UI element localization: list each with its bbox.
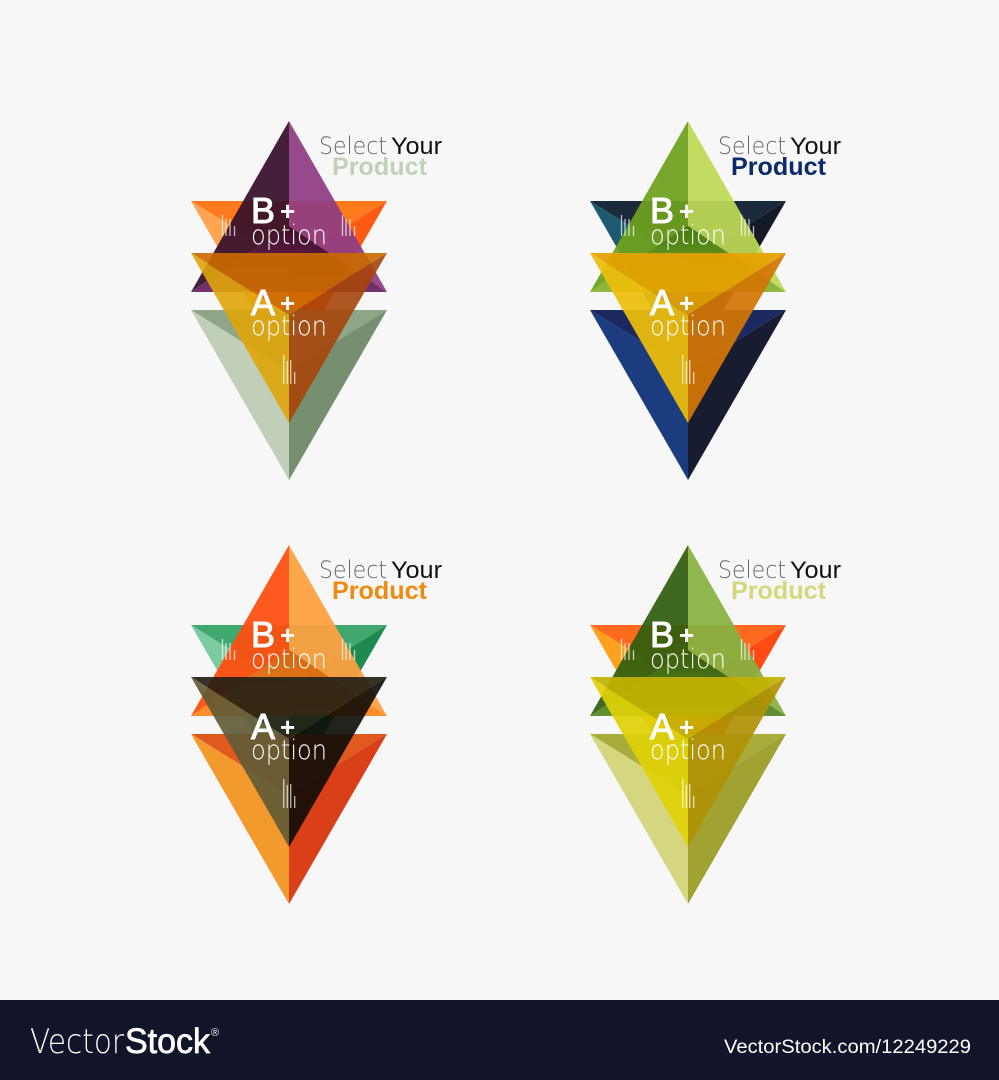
icon: bars right xyxy=(342,639,354,660)
footer logo: Vector xyxy=(30,1022,124,1062)
label: A+ option: A xyxy=(251,706,275,747)
label: A+ option: A xyxy=(650,706,674,747)
yellow downward triangle xyxy=(590,253,786,423)
label: B+ option: option xyxy=(650,644,726,675)
label: A+ option: + xyxy=(280,288,295,318)
label: B+ option xyxy=(650,190,726,251)
green upward triangle xyxy=(590,121,786,292)
icon: bars bottom xyxy=(284,779,295,808)
icon: bars left xyxy=(622,639,634,660)
heading: select your product: Your xyxy=(391,557,442,584)
green upward triangle xyxy=(590,545,786,716)
label: B+ option: B xyxy=(251,614,275,655)
label: B+ option: option xyxy=(251,644,327,675)
heading: select your product xyxy=(718,132,841,181)
heading: select your product: Select xyxy=(718,556,786,584)
label: A+ option: + xyxy=(679,712,694,742)
footer logo: ® xyxy=(211,1027,219,1039)
icon: bars right xyxy=(742,215,754,236)
heading: select your product: Select xyxy=(319,132,387,160)
dark downward triangle xyxy=(191,677,387,847)
orange and red downward triangle xyxy=(191,734,387,904)
label: A+ option: + xyxy=(280,712,295,742)
icon: bars bottom xyxy=(284,355,295,384)
heading: select your product: Select xyxy=(319,556,387,584)
amber downward triangle xyxy=(191,253,387,423)
heading: select your product: Product xyxy=(332,153,428,181)
footer image id: VectorStock.com/12249229 xyxy=(724,1037,971,1058)
heading: select your product: Your xyxy=(790,557,841,584)
label: B+ option: B xyxy=(251,190,275,231)
sage downward triangle xyxy=(191,310,387,480)
icon: bars right xyxy=(742,639,754,660)
heading: select your product: Product xyxy=(731,153,827,181)
back orange triangle xyxy=(590,625,786,795)
panel: option graphic green and navy xyxy=(590,121,841,480)
olive downward triangle xyxy=(590,734,786,904)
label: B+ option: option xyxy=(650,220,726,251)
heading: select your product xyxy=(319,132,442,181)
label: B+ option xyxy=(251,614,327,675)
label: A+ option: option xyxy=(251,735,327,766)
label: B+ option xyxy=(251,190,327,251)
heading: select your product xyxy=(319,556,442,605)
label: A+ option: A xyxy=(650,282,674,323)
orange upward triangle xyxy=(191,545,387,716)
label: B+ option xyxy=(650,614,726,675)
icon: bars right xyxy=(342,215,354,236)
back orange triangle xyxy=(191,201,387,371)
heading: select your product: Product xyxy=(332,577,428,605)
label: B+ option: + xyxy=(679,196,694,226)
icon: bars bottom xyxy=(683,355,694,384)
footer logo: Stock xyxy=(125,1022,210,1061)
label: A+ option xyxy=(251,706,327,766)
panel: option graphic purple and amber xyxy=(191,121,442,480)
label: A+ option: + xyxy=(679,288,694,318)
label: B+ option: + xyxy=(280,196,295,226)
lime downward triangle xyxy=(590,677,786,847)
heading: select your product: Product xyxy=(731,577,827,605)
label: A+ option xyxy=(251,282,327,342)
label: B+ option: + xyxy=(679,620,694,650)
label: B+ option: option xyxy=(251,220,327,251)
label: A+ option: A xyxy=(251,282,275,323)
label: A+ option xyxy=(650,706,726,766)
footer bar xyxy=(0,1000,999,1080)
back green triangle xyxy=(191,625,387,795)
label: A+ option: option xyxy=(650,311,726,342)
label: B+ option: B xyxy=(650,614,674,655)
icon: bars left xyxy=(222,215,234,236)
back dark teal triangle xyxy=(590,201,786,371)
navy downward triangle xyxy=(590,310,786,480)
icon: bars left xyxy=(622,215,634,236)
icon: bars bottom xyxy=(683,779,694,808)
label: B+ option: B xyxy=(650,190,674,231)
label: A+ option: option xyxy=(251,311,327,342)
label: A+ option: option xyxy=(650,735,726,766)
purple upward triangle xyxy=(191,121,387,292)
heading: select your product: Your xyxy=(790,133,841,160)
panel: option graphic orange and dark xyxy=(191,545,442,904)
heading: select your product: Select xyxy=(718,132,786,160)
heading: select your product: Your xyxy=(391,133,442,160)
heading: select your product xyxy=(718,556,841,605)
footer logo xyxy=(30,1022,219,1062)
label: B+ option: + xyxy=(280,620,295,650)
label: A+ option xyxy=(650,282,726,342)
panel: option graphic green and lime xyxy=(590,545,841,904)
icon: bars left xyxy=(222,639,234,660)
